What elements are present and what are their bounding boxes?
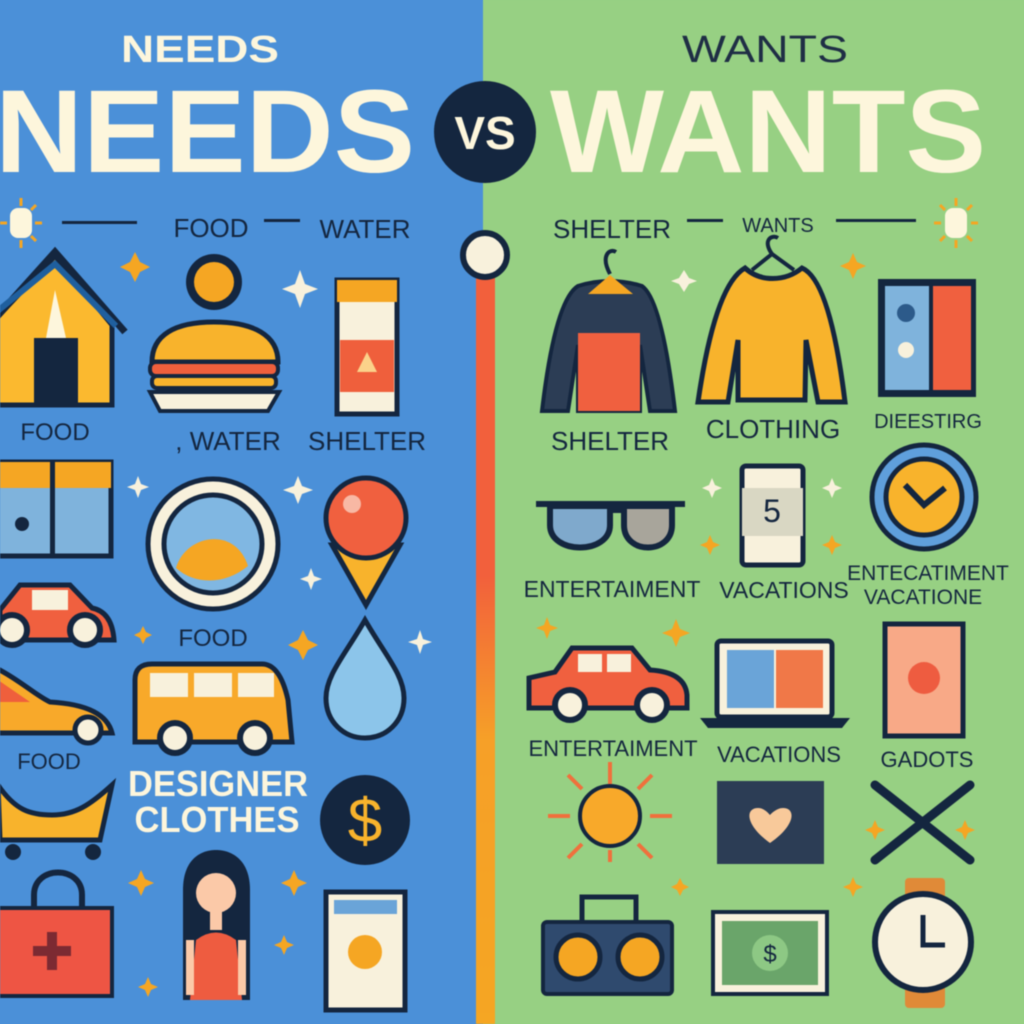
icon: card bbox=[326, 892, 405, 1010]
title: small wants: WANTS bbox=[682, 29, 848, 71]
icon: burger bbox=[150, 322, 279, 411]
labels: wants row four: ENTERTAIMENT bbox=[528, 736, 698, 761]
labels: wants row three: ENTECATIMENT bbox=[847, 562, 1009, 585]
icon: sparkle left bbox=[0, 198, 42, 248]
icon: banknote: $ bbox=[763, 941, 777, 968]
labels: needs row two: FOOD bbox=[20, 419, 90, 446]
icon: house bbox=[0, 252, 125, 406]
vs badge: VS bbox=[454, 107, 516, 159]
labels: needs row two: , WATER bbox=[175, 426, 281, 456]
labels: needs top row: WATER bbox=[320, 214, 410, 244]
icon: tablet bbox=[885, 624, 963, 736]
icon: water drop bbox=[326, 620, 404, 738]
labels: wants row two: CLOTHING bbox=[706, 414, 840, 444]
icon: shop window bbox=[0, 462, 111, 556]
icon: orange ball bbox=[186, 254, 242, 310]
labels: wants row two: SHELTER bbox=[551, 426, 669, 456]
icon: laptop bbox=[700, 641, 850, 728]
labels: wants row two bbox=[551, 411, 982, 456]
title: small needs: NEEDS bbox=[121, 29, 279, 71]
label: designer clothes bbox=[128, 763, 308, 840]
sparkles right bbox=[671, 270, 842, 498]
divider marker bbox=[463, 233, 507, 1024]
labels: wants top row: SHELTER bbox=[553, 214, 671, 244]
icon: bottle bbox=[337, 280, 397, 414]
label: food lower: FOOD bbox=[17, 749, 81, 774]
icon: person bbox=[183, 850, 250, 1000]
icon: glasses bbox=[536, 504, 685, 548]
labels: wants row three: VACATIONE bbox=[864, 586, 982, 609]
labels: needs row two bbox=[20, 419, 426, 456]
icon: panel art bbox=[878, 279, 976, 397]
labels: wants row three: VACATIONS bbox=[719, 577, 849, 603]
labels: needs top row bbox=[62, 213, 410, 244]
icon: dark sweater bbox=[542, 251, 675, 411]
title: needs: NEEDS bbox=[0, 66, 415, 198]
icon: crossed tools bbox=[875, 785, 970, 860]
icon: red car bbox=[529, 648, 687, 720]
icon: dollar coin: $ bbox=[348, 787, 382, 856]
icon: phone: 5 bbox=[763, 493, 781, 529]
icon: watch bbox=[875, 878, 971, 1008]
labels: wants top row bbox=[553, 214, 916, 244]
icon: heart screen bbox=[717, 781, 824, 864]
labels: wants row two: DIEESTIRG bbox=[874, 411, 982, 433]
icon: car bbox=[0, 585, 114, 645]
labels: needs row two: SHELTER bbox=[308, 426, 426, 456]
labels: needs top row: FOOD bbox=[173, 213, 249, 243]
sparkles left bbox=[120, 252, 318, 997]
label: designer clothes: DESIGNER bbox=[128, 763, 308, 804]
icon: yellow sweater bbox=[698, 237, 845, 402]
vs badge bbox=[434, 81, 536, 183]
label: designer clothes: CLOTHES bbox=[134, 799, 300, 840]
label: food: FOOD bbox=[178, 625, 248, 652]
icon: sun bbox=[548, 762, 672, 862]
labels: wants row four bbox=[528, 736, 973, 772]
labels: wants top row: WANTS bbox=[742, 215, 814, 237]
icon: clock bbox=[872, 445, 976, 549]
icon: dollar coin bbox=[320, 775, 410, 865]
icon: red bag bbox=[0, 872, 112, 996]
icon: bus bbox=[135, 664, 292, 753]
icon: boombox bbox=[543, 897, 672, 994]
icon: sports car bbox=[0, 668, 112, 743]
labels: wants row three: ENTERTAIMENT bbox=[524, 576, 700, 602]
icon: basket bbox=[0, 785, 112, 860]
icon: phone bbox=[742, 466, 803, 565]
labels: wants row four: GADOTS bbox=[881, 747, 973, 772]
title: wants: WANTS bbox=[550, 66, 986, 198]
icon: banknote bbox=[713, 912, 827, 994]
icon: plate bbox=[148, 479, 278, 609]
icon: sparkle right bbox=[934, 198, 978, 248]
labels: wants row four: VACATIONS bbox=[717, 742, 841, 767]
labels: wants row three bbox=[524, 562, 1009, 609]
icon: ice cream bbox=[326, 478, 406, 605]
